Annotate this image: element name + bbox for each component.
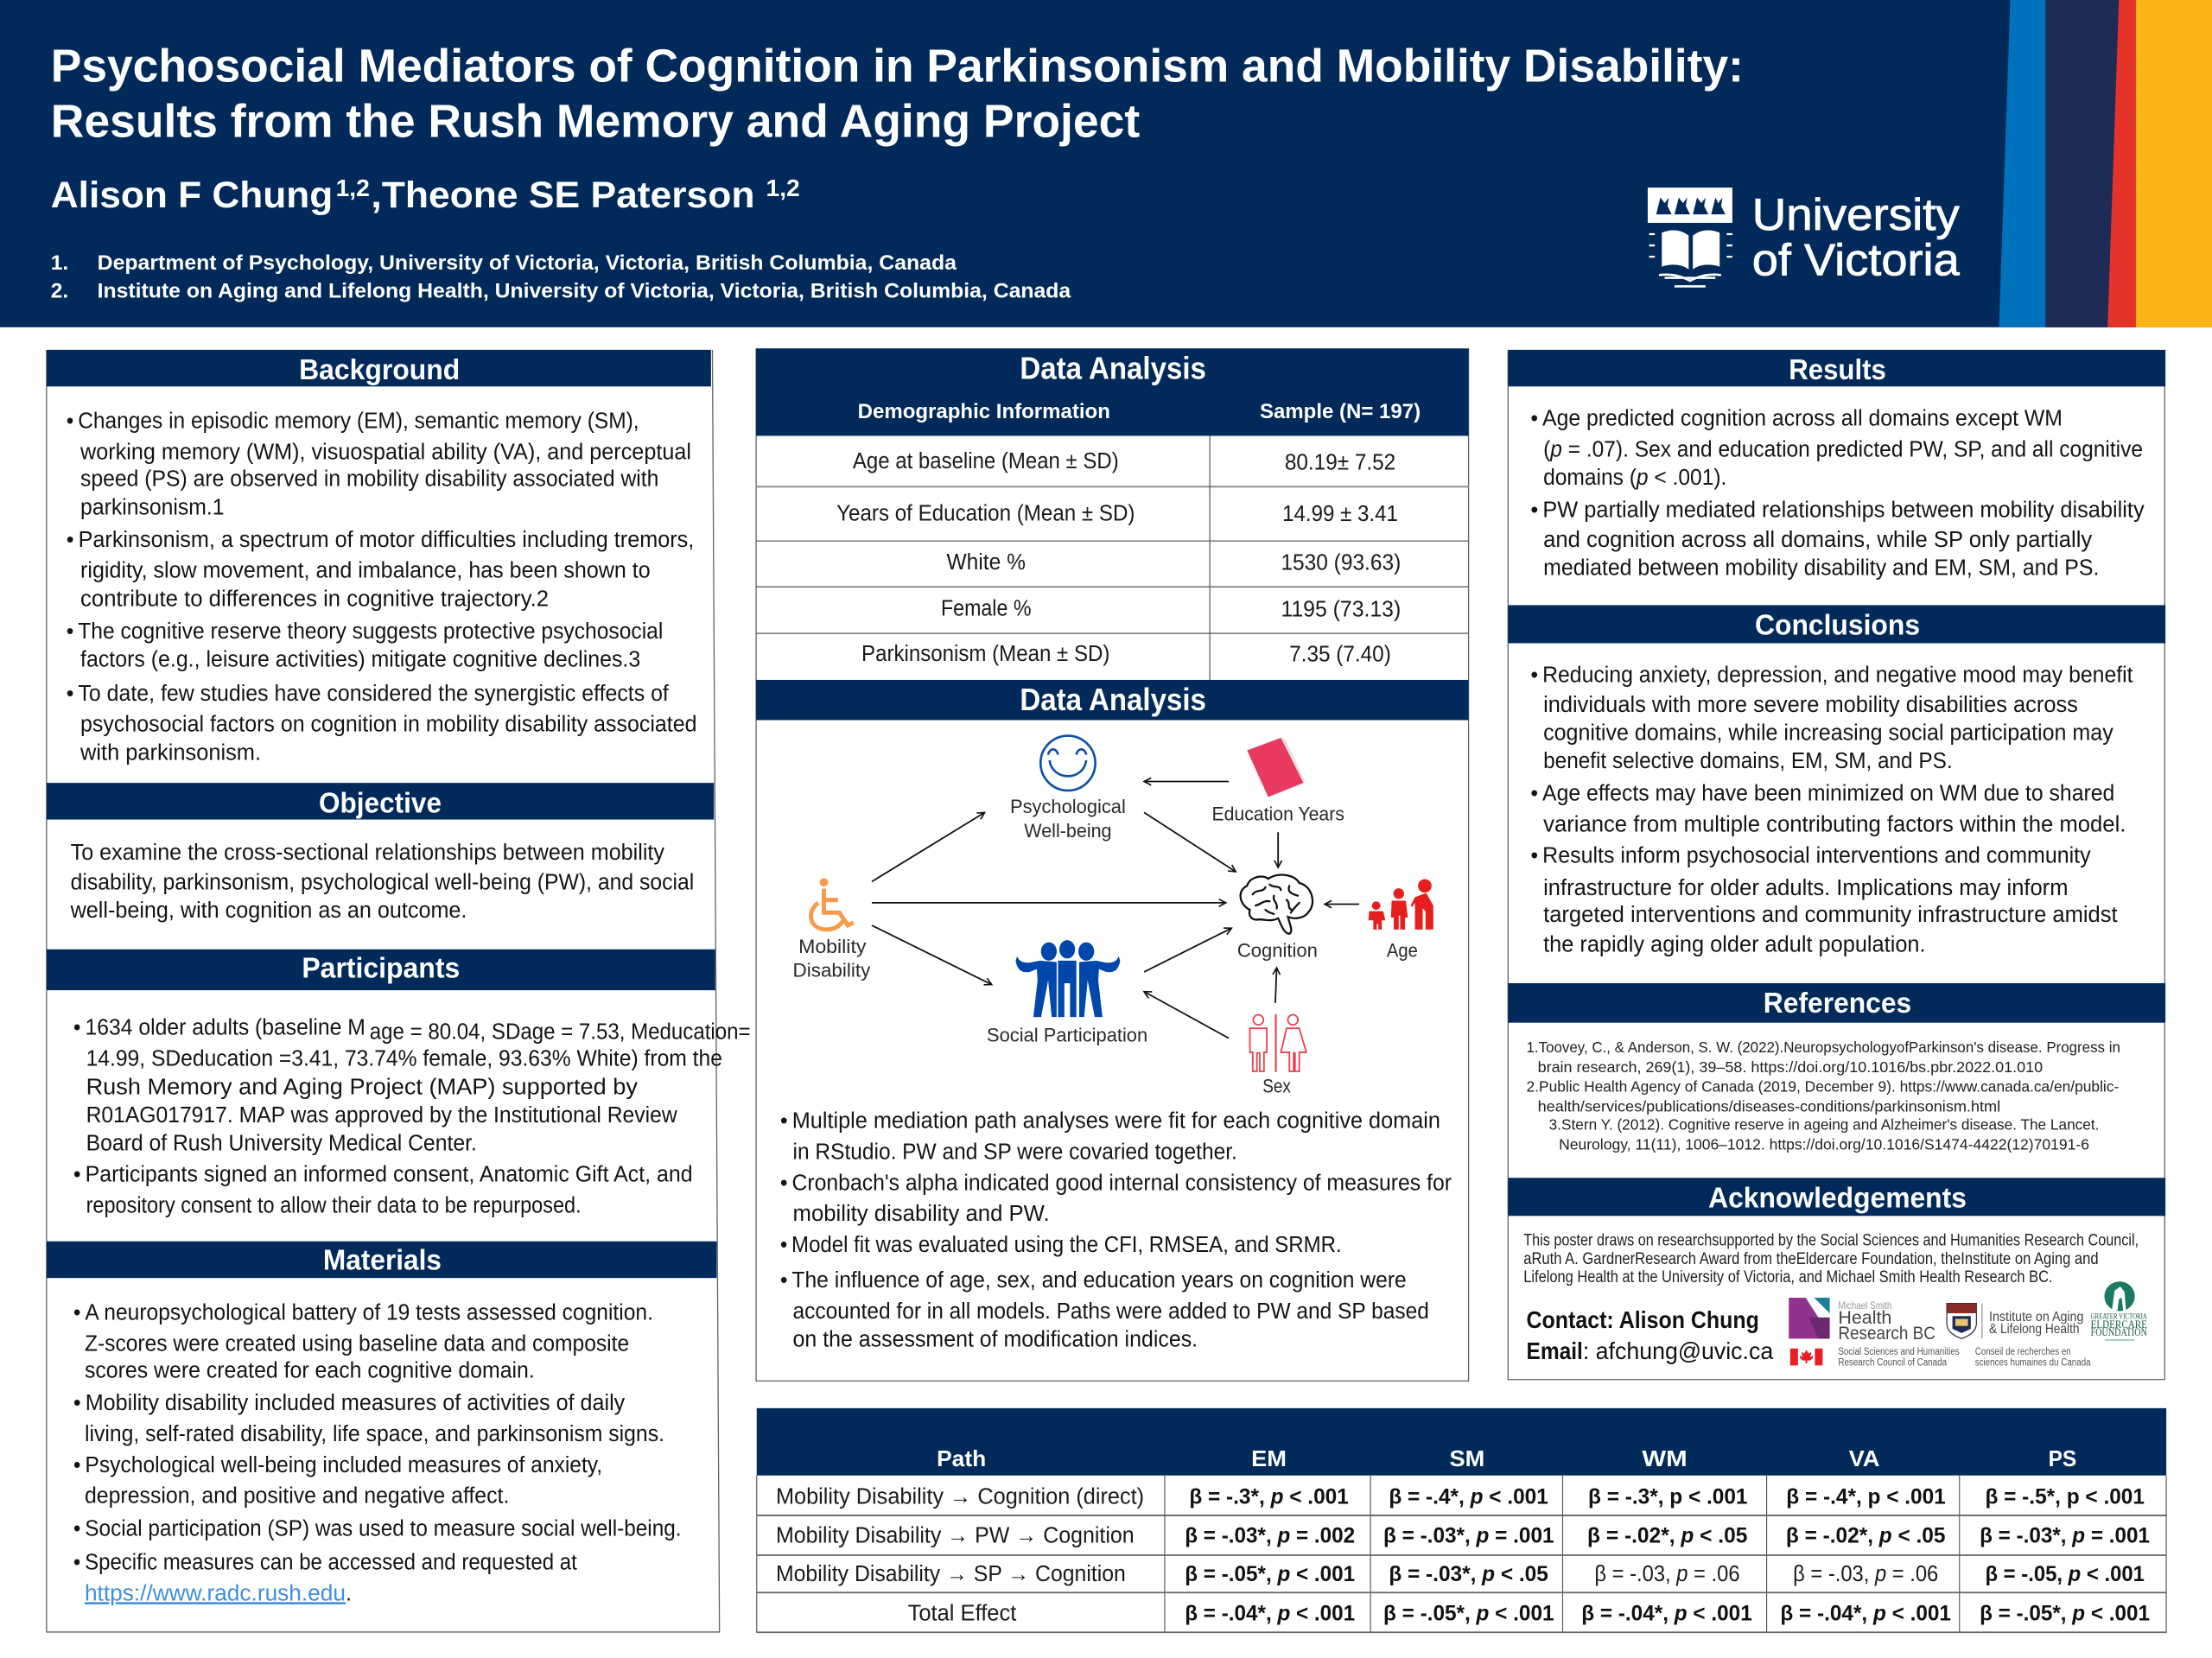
- row: via PW: β = -.02*, p < .05: [1786, 1523, 1945, 1547]
- row: total effect: β = -.04*, p < .001: [1581, 1601, 1752, 1625]
- text: materials bullets: • Social participation (SP) was used to measure social well-being.: [73, 1516, 682, 1540]
- text: analysis bullets: • Multiple mediation path analyses were fit for each cognitive domain: [780, 1109, 1440, 1133]
- text: background bullets: contribute to differences in cognitive trajectory.2: [80, 587, 549, 611]
- table header: VA: [1849, 1445, 1880, 1471]
- icon: smiley: [1040, 736, 1096, 791]
- text: materials bullets: .: [346, 1581, 352, 1605]
- text: background bullets: parkinsonism.1: [80, 495, 225, 519]
- heading: participants: [47, 950, 715, 990]
- diagram labels: Disability: [793, 960, 871, 981]
- text: materials bullets: Z-scores were created using baseline data and composite: [85, 1331, 629, 1356]
- logo: SSHRC with Canadian flag: Research Council of Canada: [1838, 1356, 1947, 1368]
- logo: SSHRC with Canadian flag: Social Sciences and Humanities: [1838, 1346, 1960, 1357]
- row: total effect: β = -.05*, p < .001: [1383, 1601, 1554, 1625]
- diagram labels: Social Participation: [987, 1025, 1147, 1046]
- row: via SP: β = -.05*, p < .001: [1185, 1562, 1355, 1586]
- table: demographics: Female %: [941, 597, 1031, 621]
- heading: participants: Participants: [302, 952, 460, 984]
- heading: materials: [47, 1242, 716, 1278]
- row: via PW: β = -.03*, p = .001: [1383, 1523, 1554, 1547]
- text: contact: : afchung@uvic.ca: [1583, 1337, 1774, 1364]
- diagram labels: Cognition: [1237, 940, 1318, 962]
- text: conclusions bullets: [1530, 664, 2133, 956]
- colour stripes: [1999, 0, 2212, 327]
- text: conclusions bullets: infrastructure for older adults. Implications may inform: [1543, 876, 2068, 900]
- text: participants bullets: age = 80.04, SDage = 7.53, Meducation=: [370, 1020, 751, 1045]
- text: materials bullets: scores were created for each cognitive domain.: [85, 1358, 535, 1382]
- authors: 1,2: [766, 175, 800, 201]
- row: total effect: β = -.04*, p < .001: [1780, 1601, 1951, 1625]
- authors: 1,2: [336, 175, 370, 201]
- section: acknowledgements: [1508, 1178, 2165, 1368]
- logo: SSHRC with Canadian flag: sciences humaines du Canada: [1975, 1356, 2091, 1368]
- text: materials bullets: • Psychological well-being included measures of anxiety,: [73, 1453, 602, 1477]
- heading: conclusions: [1508, 605, 2165, 643]
- row: via PW: β = -.03*, p = .002: [1185, 1523, 1355, 1547]
- row: direct: β = -.4*, p < .001: [1389, 1484, 1548, 1509]
- text: materials bullets: [73, 1300, 682, 1605]
- text: results bullets: (p = .07). Sex and education predicted PW, SP, and all cognitive: [1543, 437, 2143, 461]
- diagram labels: Well-being: [1024, 820, 1112, 842]
- diagram labels: Age: [1387, 940, 1418, 962]
- row: via SP: Mobility Disability → SP → Cognition: [776, 1562, 1126, 1586]
- text: results bullets: • Age predicted cognition across all domains except WM: [1530, 406, 2063, 430]
- table: demographics: Parkinsonism (Mean ± SD): [861, 642, 1109, 666]
- text: conclusions bullets: • Age effects may have been minimized on WM due to shared: [1530, 782, 2114, 806]
- logo: Eldercare Foundation: GREATER VICTORIA: [2091, 1313, 2147, 1322]
- logo: SSHRC with Canadian flag: Conseil de recherches en: [1975, 1346, 2071, 1357]
- text: background bullets: speed (PS) are observed in mobility disability associated with: [80, 467, 658, 492]
- table: mediation path results: [757, 1408, 2166, 1632]
- text: results bullets: domains (p < .001).: [1543, 466, 1726, 490]
- text: analysis bullets: • The influence of age, sex, and education years on cognition were: [780, 1268, 1407, 1293]
- affiliations: 1.: [51, 251, 68, 275]
- table: demographics: 1530 (93.63): [1281, 551, 1401, 575]
- diagram labels: Sex: [1262, 1075, 1291, 1096]
- diagram: mediation model: [793, 736, 1433, 1096]
- text: objective: well-being, with cognition as an outcome.: [70, 899, 467, 923]
- title: Results from the Rush Memory and Aging Project: [51, 95, 1140, 147]
- row: via PW: Mobility Disability → PW → Cognition: [776, 1523, 1135, 1547]
- text: analysis bullets: accounted for in all models. Paths were added to PW and SP based: [793, 1299, 1429, 1324]
- heading: materials: Materials: [323, 1244, 442, 1276]
- table header: WM: [1642, 1445, 1688, 1471]
- row: direct: β = -.4*, p < .001: [1786, 1484, 1946, 1509]
- text: conclusions bullets: the rapidly aging older adult population.: [1543, 932, 1926, 956]
- affiliations: [51, 251, 1071, 302]
- affiliations: 2.: [51, 279, 68, 302]
- logo: Michael Smith Health Research BC: Health: [1838, 1308, 1891, 1328]
- icon: social participation group: [1016, 940, 1120, 1017]
- logo: Institute on Aging: Institute on Aging: [1989, 1310, 2083, 1324]
- affiliations: Department of Psychology, University of Victoria, Victoria, British Columbia, Canada: [98, 251, 957, 275]
- section: objective: [47, 783, 714, 923]
- logo: Institute on Aging: & Lifelong Health: [1989, 1322, 2080, 1337]
- text: reference list: Neurology, 11(11), 1006–1012. https://doi.org/10.1016/S1474-4422(12)70191-6: [1559, 1136, 2089, 1153]
- text: materials bullets: • Specific measures can be accessed and requested at: [73, 1550, 577, 1574]
- text: background bullets: psychosocial factors on cognition in mobility disability associated: [80, 713, 697, 737]
- row: direct: Mobility Disability → Cognition (direct): [776, 1484, 1144, 1509]
- row: via SP: β = -.03, p = .06: [1594, 1562, 1740, 1586]
- text: conclusions bullets: benefit selective domains, EM, SM, and PS.: [1543, 749, 1953, 773]
- diagram labels: Psychological: [1010, 796, 1126, 817]
- text: participants bullets: Rush Memory and Aging Project (MAP) supported by: [86, 1075, 638, 1099]
- text: background bullets: • Parkinsonism, a spectrum of motor difficulties including tremors,: [67, 528, 694, 552]
- icon: book: [1247, 738, 1305, 797]
- text: conclusions bullets: individuals with more severe mobility disabilities across: [1543, 693, 2078, 717]
- affiliations: Institute on Aging and Lifelong Health, University of Victoria, Victoria, British Columbia, Canada: [98, 279, 1071, 302]
- section: results: [1508, 350, 2165, 580]
- text: results bullets: mediated between mobility disability and EM, SM, and PS.: [1543, 556, 2099, 580]
- heading: data analysis model: Data Analysis: [1020, 682, 1206, 717]
- heading: conclusions: Conclusions: [1755, 610, 1920, 642]
- text: objective: To examine the cross-sectional relationships between mobility: [71, 841, 664, 865]
- row: total effect: β = -.04*, p < .001: [1185, 1601, 1355, 1625]
- row: via PW: β = -.02*, p < .05: [1587, 1523, 1747, 1547]
- panel: header banner: [0, 0, 2212, 327]
- logo: SSHRC with Canadian flag: [1790, 1346, 2091, 1368]
- heading: data analysis model: [756, 680, 1469, 720]
- heading: acknowledgements: [1508, 1178, 2165, 1216]
- table header: SM: [1450, 1445, 1484, 1471]
- text: conclusions bullets: variance from multiple contributing factors within the model.: [1543, 813, 2126, 837]
- logo: Eldercare Foundation: [2091, 1281, 2147, 1340]
- row: via SP: β = -.05, p < .001: [1985, 1562, 2145, 1586]
- panel: left column: [47, 350, 751, 1632]
- text: reference list: 3.Stern Y. (2012). Cognitive reserve in ageing and Alzheimer's disease. The Lancet.: [1549, 1116, 2099, 1134]
- text: analysis bullets: [780, 1109, 1452, 1352]
- text: reference list: 1.Toovey, C., & Anderson, S. W. (2022).NeuropsychologyofParkinson's disease. Progress in: [1527, 1039, 2120, 1056]
- authors: ,Theone SE Paterson: [371, 175, 754, 215]
- heading: background: Background: [299, 354, 460, 386]
- row: via SP: β = -.03, p = .06: [1793, 1562, 1938, 1586]
- row: total effect: Total Effect: [908, 1601, 1016, 1625]
- table: demographics: Years of Education (Mean ± SD): [836, 501, 1135, 525]
- row: direct: β = -.3*, p < .001: [1189, 1484, 1349, 1509]
- table grid: [757, 1476, 2166, 1632]
- text: background bullets: [67, 410, 697, 765]
- logo: Michael Smith Health Research BC: Michael Smith: [1838, 1299, 1892, 1312]
- heading: references: [1508, 983, 2165, 1023]
- text: background bullets: with parkinsonism.: [79, 740, 261, 765]
- heading: background: [47, 350, 711, 386]
- text: funding statement: aRuth A. GardnerResearch Award from theEldercare Foundation, theInstitute on Aging and: [1523, 1250, 2099, 1268]
- row: direct: β = -.5*, p < .001: [1985, 1484, 2145, 1509]
- text: conclusions bullets: • Reducing anxiety, depression, and negative mood may benefit: [1530, 664, 2133, 688]
- text: background bullets: rigidity, slow movement, and imbalance, has been shown to: [80, 559, 651, 583]
- text: participants bullets: repository consent to allow their data to be repurposed.: [86, 1193, 582, 1217]
- section: references: [1508, 983, 2165, 1153]
- table: demographics: [756, 400, 1469, 680]
- text: contact: Email: [1527, 1337, 1583, 1364]
- text: participants bullets: • Participants signed an informed consent, Anatomic Gift Act, and: [73, 1162, 693, 1186]
- section: materials: [47, 1242, 716, 1605]
- text: materials bullets: https://www.radc.rush.edu: [85, 1581, 346, 1605]
- section: participants: [47, 950, 751, 1217]
- table: demographics: Age at baseline (Mean ± SD): [853, 449, 1119, 473]
- icon: university crest: [1648, 187, 1732, 286]
- diagram labels: Mobility: [798, 936, 867, 957]
- arrows: [872, 781, 1359, 1039]
- text: results bullets: • PW partially mediated relationships between mobility disability: [1530, 499, 2145, 523]
- table: demographics: 80.19± 7.52: [1285, 451, 1395, 475]
- icon: brain: [1241, 875, 1313, 934]
- table header: PS: [2049, 1445, 2076, 1471]
- text: participants bullets: 14.99, SDeducation =3.41, 73.74% female, 93.63% White) from the: [86, 1047, 722, 1071]
- text: participants bullets: Board of Rush University Medical Center.: [86, 1132, 477, 1156]
- table: demographics: 14.99 ± 3.41: [1282, 502, 1398, 526]
- heading: references: References: [1764, 988, 1911, 1020]
- section: conclusions: [1508, 605, 2165, 956]
- text: background bullets: factors (e.g., leisure activities) mitigate cognitive declines.3: [80, 648, 640, 672]
- row: via SP: [776, 1562, 2145, 1586]
- authors: [51, 175, 800, 215]
- text: analysis bullets: in RStudio. PW and SP were covaried together.: [793, 1140, 1237, 1164]
- row: via PW: β = -.03*, p = .001: [1980, 1523, 2150, 1547]
- text: participants bullets: [73, 1016, 751, 1217]
- logo wordmark: University: [1752, 190, 1961, 240]
- text: objective: [70, 841, 694, 923]
- heading: data analysis table: Data Analysis: [1020, 350, 1206, 385]
- authors: Alison F Chung: [51, 175, 333, 215]
- text: results bullets: [1530, 406, 2145, 580]
- row: total effect: [908, 1601, 2150, 1625]
- heading: results: Results: [1789, 354, 1886, 386]
- icon: wheelchair: [810, 878, 854, 930]
- text: background bullets: • The cognitive reserve theory suggests protective psychosocial: [67, 619, 663, 644]
- text: conclusions bullets: cognitive domains, while increasing social participation may: [1543, 721, 2113, 745]
- logo: Michael Smith Health Research BC: [1789, 1298, 1936, 1344]
- row: direct: β = -.3*, p < .001: [1588, 1484, 1748, 1509]
- text: materials bullets: living, self-rated disability, life space, and parkinsonism signs.: [85, 1422, 664, 1446]
- text: conclusions bullets: • Results inform psychosocial interventions and community: [1530, 844, 2091, 868]
- panel: right column: [1508, 350, 2165, 1380]
- text: reference list: health/services/publications/diseases-conditions/parkinsonism.html: [1538, 1098, 2000, 1115]
- text: participants bullets: • 1634 older adults (baseline M: [73, 1016, 365, 1040]
- row: total effect: β = -.05*, p < .001: [1980, 1601, 2150, 1625]
- text: materials bullets: • A neuropsychological battery of 19 tests assessed cognition.: [73, 1300, 653, 1324]
- text: participants bullets: R01AG017917. MAP was approved by the Institutional Review: [86, 1103, 677, 1128]
- text: background bullets: working memory (WM), visuospatial ability (VA), and perceptual: [79, 441, 691, 465]
- text: results bullets: and cognition across all domains, while SP only partially: [1543, 528, 2092, 552]
- text: contact: Contact: Alison Chung: [1527, 1306, 1759, 1333]
- text: conclusions bullets: targeted interventions and community infrastructure amidst: [1543, 903, 2118, 927]
- text: analysis bullets: • Model fit was evaluated using the CFI, RMSEA, and SRMR.: [780, 1233, 1342, 1257]
- text: contact: [1527, 1306, 1774, 1364]
- heading: data analysis table: [756, 348, 1469, 435]
- heading: objective: Objective: [319, 787, 442, 819]
- row: via SP: β = -.03*, p < .05: [1389, 1562, 1548, 1586]
- logo: Eldercare Foundation: ELDERCARE: [2091, 1318, 2147, 1331]
- table: demographics: Sample (N= 197): [1260, 400, 1421, 423]
- panel: middle column: [756, 348, 1469, 1381]
- logo: Institute on Aging: [1947, 1304, 2083, 1338]
- text: funding statement: Lifelong Health at the University of Victoria, and Michael Smith Health Research BC.: [1523, 1268, 2053, 1286]
- diagram labels: Education Years: [1211, 803, 1344, 824]
- heading: results: [1508, 350, 2165, 386]
- logo: Eldercare Foundation: FOUNDATION: [2091, 1326, 2147, 1338]
- text: background bullets: • Changes in episodic memory (EM), semantic memory (SM),: [67, 410, 639, 434]
- text: reference list: [1527, 1039, 2120, 1153]
- icon: sex figures: [1250, 1014, 1306, 1072]
- text: analysis bullets: mobility disability and PW.: [793, 1202, 1050, 1226]
- heading: objective: [47, 783, 714, 820]
- text: funding statement: [1523, 1232, 2139, 1286]
- text: materials bullets: • Mobility disability included measures of activities of daily: [73, 1391, 626, 1415]
- table header: [757, 1408, 2166, 1476]
- section: background: [47, 350, 711, 765]
- text: objective: disability, parkinsonism, psychological well-being (PW), and social: [71, 871, 694, 895]
- table: demographics: 1195 (73.13): [1281, 597, 1401, 621]
- row: via PW: [776, 1523, 2150, 1547]
- table: demographics: 7.35 (7.40): [1289, 643, 1391, 667]
- table header: EM: [1251, 1445, 1287, 1471]
- title: Psychosocial Mediators of Cognition in Parkinsonism and Mobility Disability:: [51, 41, 1744, 92]
- text: reference list: brain research, 269(1), 39–58. https://doi.org/10.1016/bs.pbr.2022.01.010: [1538, 1058, 2043, 1076]
- logo wordmark: [1752, 190, 1961, 285]
- title: [51, 41, 1744, 147]
- text: reference list: 2.Public Health Agency of Canada (2019, December 9). https://www.canada.ca/en/public-: [1527, 1078, 2119, 1096]
- heading: acknowledgements: Acknowledgements: [1708, 1183, 1967, 1215]
- icon: age figures: [1369, 879, 1433, 930]
- text: materials bullets: depression, and positive and negative affect.: [85, 1484, 509, 1509]
- table: demographics: Demographic Information: [858, 400, 1110, 423]
- logo wordmark: of Victoria: [1752, 235, 1961, 285]
- logo: Michael Smith Health Research BC: Research BC: [1838, 1324, 1936, 1344]
- table header: Path: [937, 1445, 986, 1471]
- text: analysis bullets: • Cronbach's alpha indicated good internal consistency of measures for: [780, 1171, 1452, 1195]
- diagram labels: [793, 796, 1418, 1096]
- text: analysis bullets: on the assessment of modification indices.: [793, 1328, 1198, 1352]
- text: background bullets: • To date, few studies have considered the synergistic effects of: [67, 682, 670, 706]
- table: demographics: White %: [947, 550, 1026, 575]
- row: direct: [776, 1484, 2145, 1509]
